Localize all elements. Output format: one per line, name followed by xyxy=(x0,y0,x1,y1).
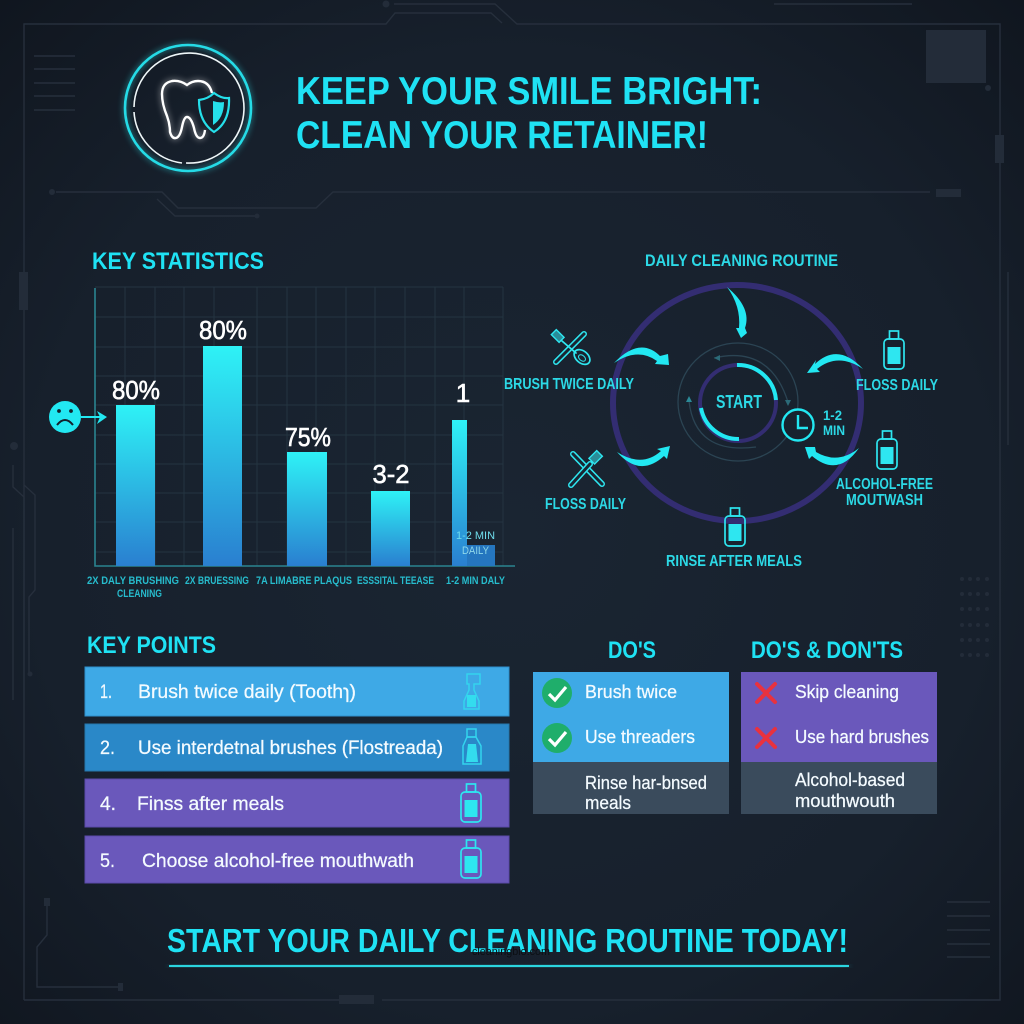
axis labels: ESSSITAL TEEASE xyxy=(357,575,434,587)
label: floss daily left: FLOSS DAILY xyxy=(545,496,627,513)
label: alcohol-free mouthwash xyxy=(836,476,933,509)
row 1: Brush twice daily (Toothɿ) xyxy=(138,682,356,703)
row 4 xyxy=(85,836,509,883)
heading: routine: DAILY CLEANING ROUTINE xyxy=(645,251,838,270)
axis labels: DAILY xyxy=(462,545,490,557)
icon: cross 2 xyxy=(757,729,775,747)
bars xyxy=(116,346,495,566)
value labels: 75% xyxy=(285,422,331,452)
center dial xyxy=(678,343,798,461)
curved arrows xyxy=(614,287,863,466)
icon: sad face with arrow xyxy=(49,401,107,433)
outer ring xyxy=(613,285,861,521)
label: alcohol-free mouthwash: ALCOHOL-FREE xyxy=(836,476,933,493)
value labels: 80% xyxy=(112,375,160,405)
heading: key points: KEY POINTS xyxy=(87,632,216,659)
title xyxy=(296,70,762,157)
bar chart xyxy=(87,287,515,600)
don'ts text: Alcohol-based xyxy=(795,770,905,790)
heading: do's: DO'S xyxy=(608,637,656,664)
row 2 xyxy=(85,724,509,771)
icon: bottle mouthwash xyxy=(877,431,897,469)
icon: check 2 xyxy=(542,723,572,753)
value labels: 3-2 xyxy=(372,459,410,489)
axis labels xyxy=(87,530,506,600)
label: brush twice daily: BRUSH TWICE DAILY xyxy=(504,376,635,393)
panel: do's xyxy=(533,637,729,814)
do's text: Rinse har-bnsed xyxy=(585,773,707,793)
call to action: START YOUR DAILY CLEANING ROUTINE TODAY! xyxy=(167,922,848,959)
axis labels: 1-2 MIN DALY xyxy=(446,575,506,587)
axis labels: CLEANING xyxy=(117,588,162,600)
icon: crossed brush xyxy=(551,330,593,367)
icon: cross 1 xyxy=(757,684,775,702)
axis labels: 2X BRUESSING xyxy=(185,575,249,587)
icon: clock xyxy=(782,410,814,440)
heading: key statistics: KEY STATISTICS xyxy=(92,248,264,275)
do's text: Brush twice xyxy=(585,682,677,702)
row 4: 5. xyxy=(100,851,115,872)
do's text: Use threaders xyxy=(585,727,695,747)
don'ts text: Use hard brushes xyxy=(795,727,929,747)
don'ts text xyxy=(795,682,929,811)
value labels xyxy=(112,315,470,489)
don'ts text: Skip cleaning xyxy=(795,682,899,702)
icon: bottle rinse xyxy=(725,508,745,546)
row 3 xyxy=(85,779,509,827)
value labels: 1 xyxy=(456,378,470,408)
label: rinse after meals: RINSE AFTER MEALS xyxy=(666,553,802,570)
row 3: Finss after meals xyxy=(137,794,284,815)
title: KEEP YOUR SMILE BRIGHT: xyxy=(296,70,762,113)
value labels: 80% xyxy=(199,315,247,345)
do's text: meals xyxy=(585,793,631,813)
label: floss daily right: FLOSS DAILY xyxy=(856,377,939,394)
row 1 xyxy=(85,667,509,716)
duration label xyxy=(823,407,845,438)
panel: key points list xyxy=(85,667,509,883)
watermark: cleaningbio.com xyxy=(472,946,550,958)
axis labels: 1-2 MIN xyxy=(456,530,495,542)
row 3: 4. xyxy=(100,794,116,815)
heading: do's and don'ts: DO'S & DON'TS xyxy=(751,637,903,664)
start label: START xyxy=(716,392,762,412)
row 2: 2. xyxy=(100,738,115,759)
row 2: Use interdetnal brushes (Flostreada) xyxy=(138,738,443,759)
label: alcohol-free mouthwash: MOUTWASH xyxy=(846,492,923,509)
icon: tooth with shield logo xyxy=(125,45,251,171)
panel: daily cleaning routine xyxy=(504,251,939,570)
axis labels: 2X DALY BRUSHING xyxy=(87,575,179,587)
duration label: MIN xyxy=(823,422,845,438)
duration label: 1-2 xyxy=(823,407,842,423)
do's text xyxy=(585,682,707,813)
don'ts text: mouthwouth xyxy=(795,791,895,811)
panel: do's and don'ts xyxy=(741,637,937,814)
icon: check 1 xyxy=(542,678,572,708)
axis labels: 7A LIMABRE PLAQUS xyxy=(256,575,352,587)
title: CLEAN YOUR RETAINER! xyxy=(296,114,708,157)
icon: crossed floss tools xyxy=(571,451,602,485)
icon: bottle floss xyxy=(884,331,904,369)
row 1: 1. xyxy=(100,682,112,703)
row 4: Choose alcohol-free mouthwath xyxy=(142,851,414,872)
